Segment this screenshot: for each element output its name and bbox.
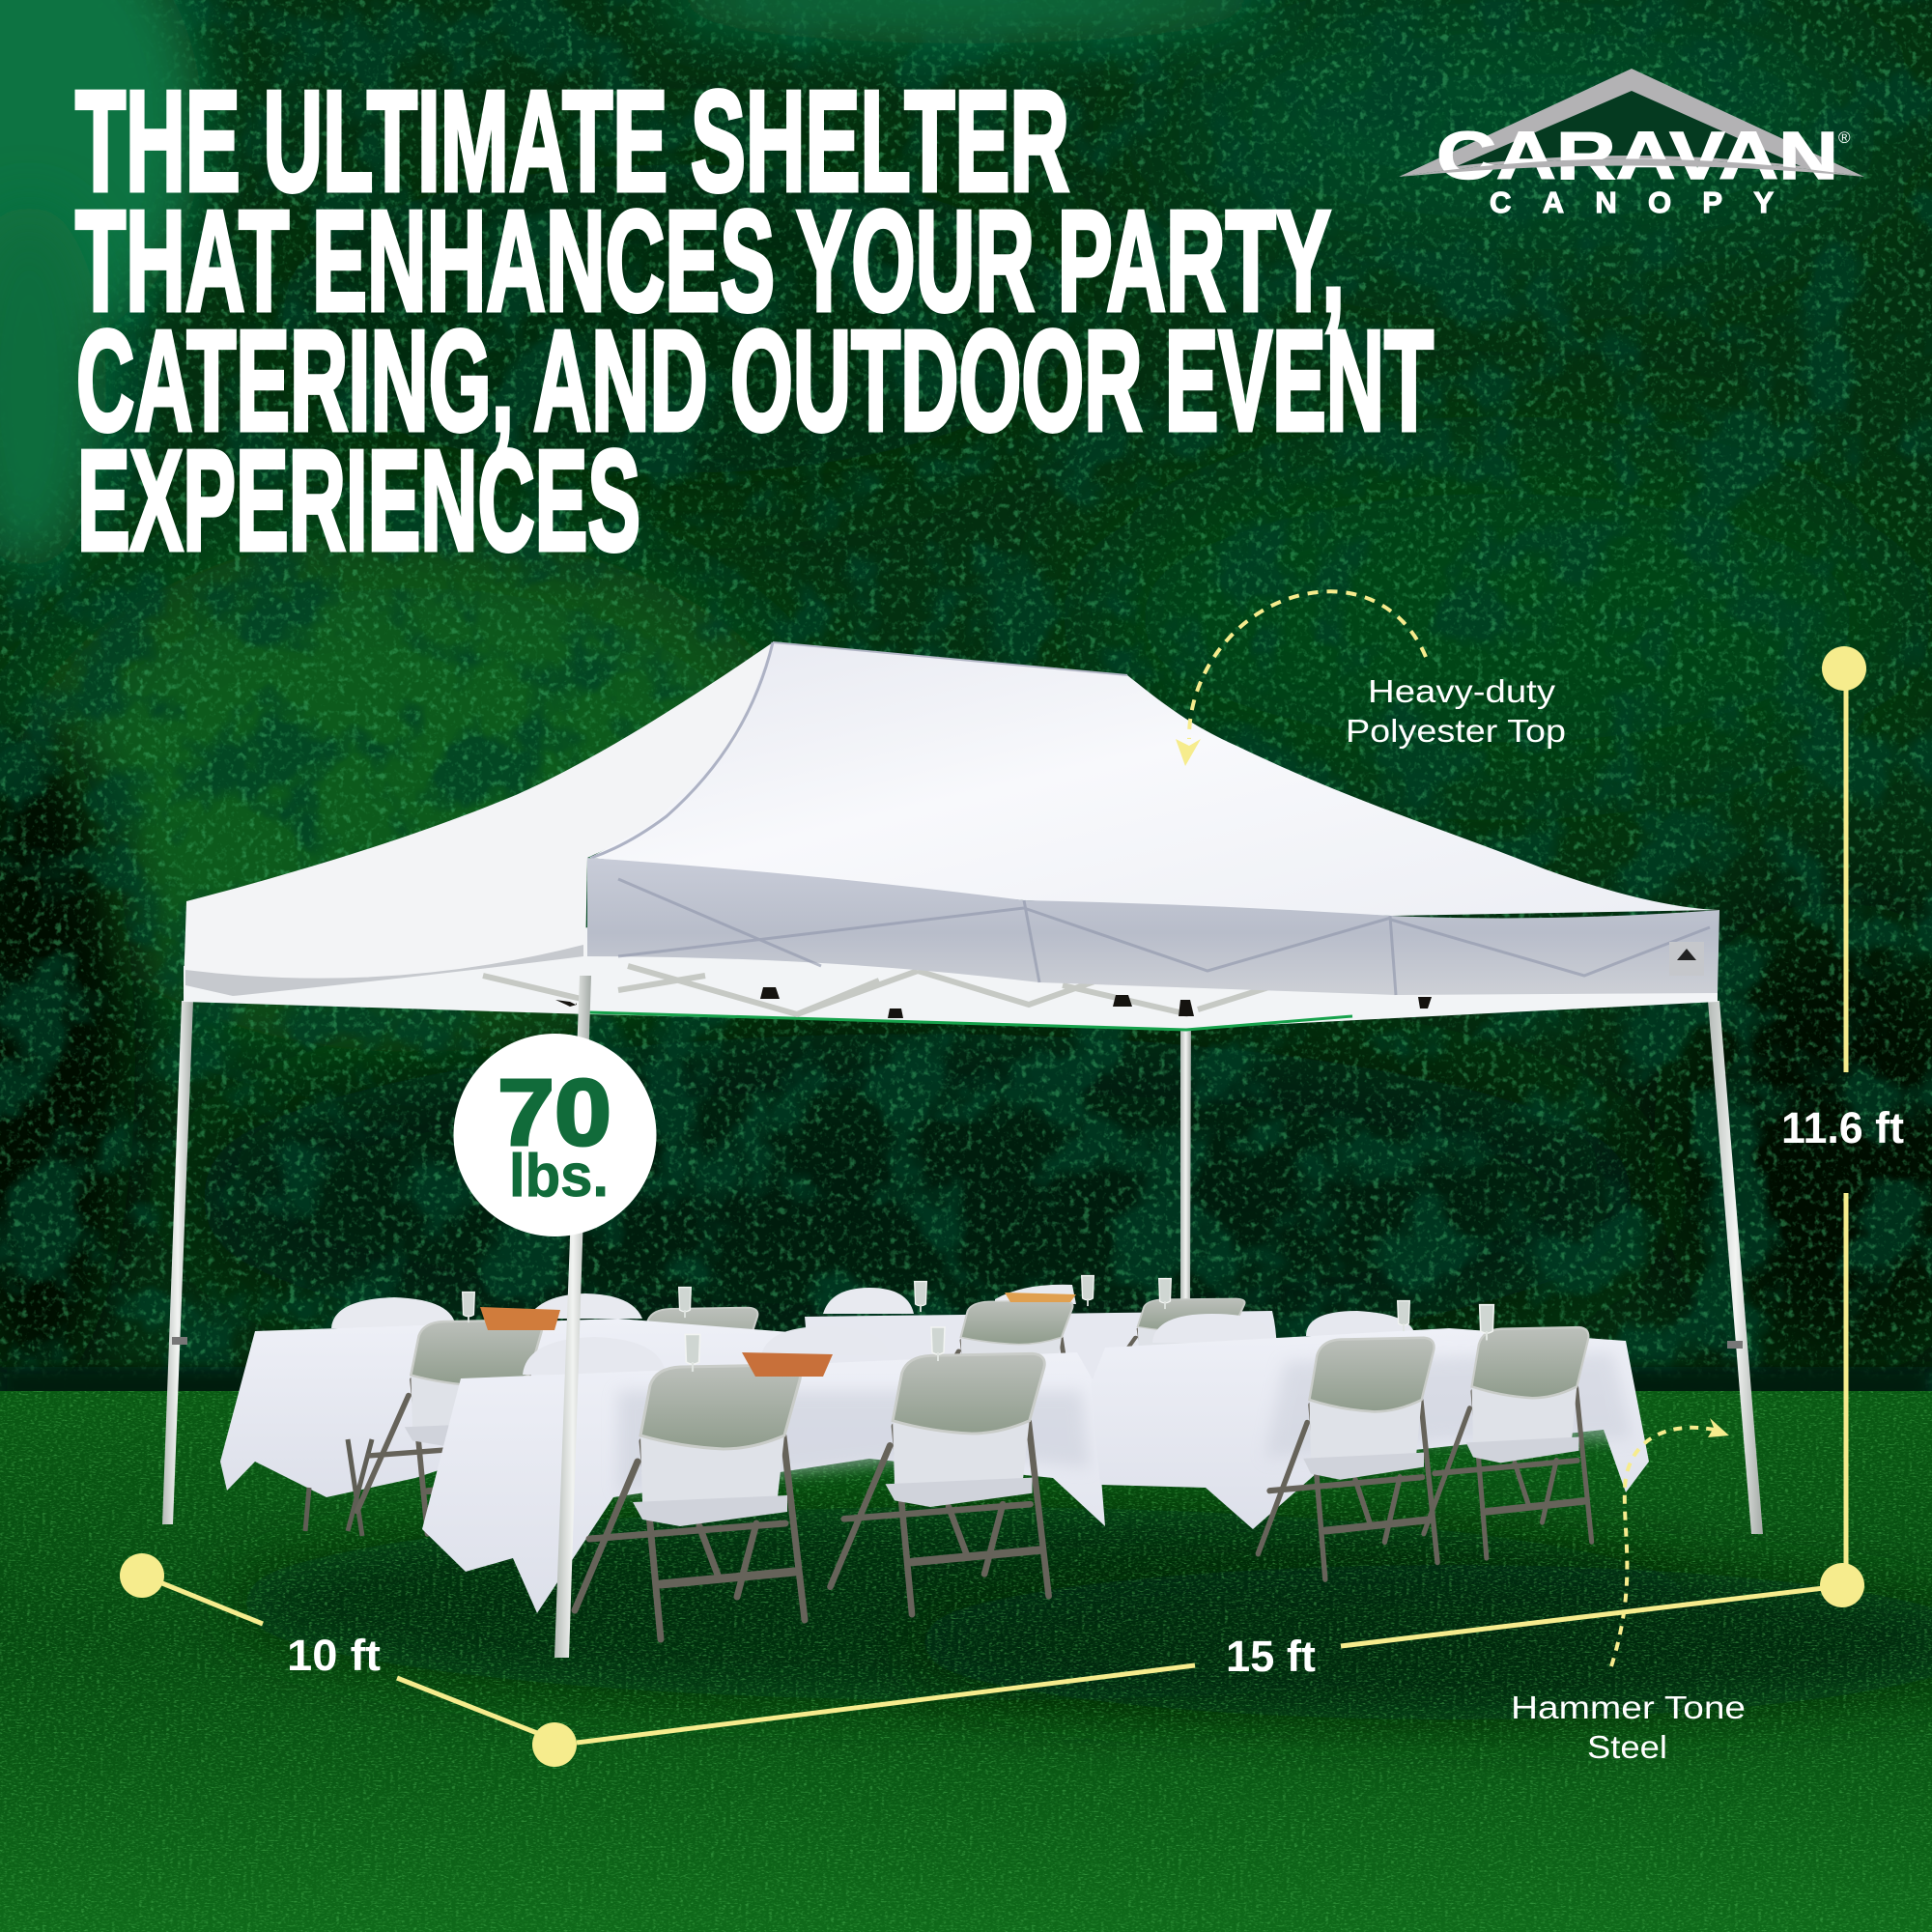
canopy poles back xyxy=(162,1001,1763,1534)
canopy truss xyxy=(483,966,1275,1014)
callout text: steel xyxy=(1511,1690,1746,1765)
badge number: 70 xyxy=(497,1060,611,1165)
white chair backs xyxy=(331,1285,1076,1328)
left table legs xyxy=(305,1439,372,1536)
logo wordmark: CARAVAN xyxy=(1436,118,1838,193)
left valance shadow xyxy=(185,945,583,996)
baskets xyxy=(480,1293,1076,1377)
badge: 70 lbs xyxy=(454,1034,657,1236)
callout text: polyester: Polyester Top xyxy=(1346,713,1566,749)
dimension labels xyxy=(287,1103,1904,1681)
front table shade xyxy=(618,1391,1090,1492)
callout text: polyester: Heavy-duty xyxy=(1368,673,1556,709)
title: EXPERIENCES xyxy=(77,421,640,581)
front valance xyxy=(587,858,1719,995)
ridge seam xyxy=(591,642,773,858)
back row chairs xyxy=(593,1298,1248,1478)
callout text: steel: Hammer Tone xyxy=(1511,1690,1746,1725)
valance folds xyxy=(618,879,1710,995)
roof panel xyxy=(589,642,1719,916)
dimension lines xyxy=(162,690,1846,1743)
glasses xyxy=(463,1276,1493,1372)
green trim xyxy=(589,1012,1352,1030)
canopy xyxy=(184,642,1719,1030)
title xyxy=(75,62,1434,581)
callout text: steel: Steel xyxy=(1587,1729,1667,1765)
logo roof xyxy=(1399,69,1864,177)
front pole xyxy=(554,976,591,1658)
dimension end points xyxy=(120,646,1866,1767)
table group xyxy=(220,1276,1649,1639)
left table xyxy=(220,1319,802,1497)
canopy underside xyxy=(184,927,1718,1029)
front table xyxy=(422,1352,1105,1613)
callout: polyester top arrow xyxy=(1176,591,1426,766)
logo arc xyxy=(1399,158,1864,177)
right table shade xyxy=(1265,1352,1633,1459)
callout text: polyester xyxy=(1346,673,1566,749)
background: forest xyxy=(0,0,1932,1449)
dimension labels: 11.6 ft xyxy=(1781,1103,1904,1152)
background: lawn xyxy=(0,1391,1932,1932)
badge unit: lbs. xyxy=(509,1143,609,1209)
callout: steel arrow xyxy=(1611,1418,1729,1666)
right table xyxy=(1091,1328,1649,1529)
valance tag xyxy=(1669,942,1704,976)
registered mark: ® xyxy=(1838,128,1851,147)
left valance xyxy=(184,642,773,995)
dimension labels: 10 ft xyxy=(287,1631,381,1680)
logo subtitle: CANOPY xyxy=(1490,185,1774,219)
front chairs xyxy=(575,1327,1592,1639)
dimension labels: 15 ft xyxy=(1226,1632,1316,1681)
logo: Caravan Canopy xyxy=(1399,69,1864,219)
left chair xyxy=(357,1321,546,1534)
mid white chair backs xyxy=(523,1311,1415,1375)
back table xyxy=(805,1311,1277,1430)
title: THE ULTIMATE SHELTER xyxy=(75,62,1069,221)
truss end caps xyxy=(555,987,1432,1018)
